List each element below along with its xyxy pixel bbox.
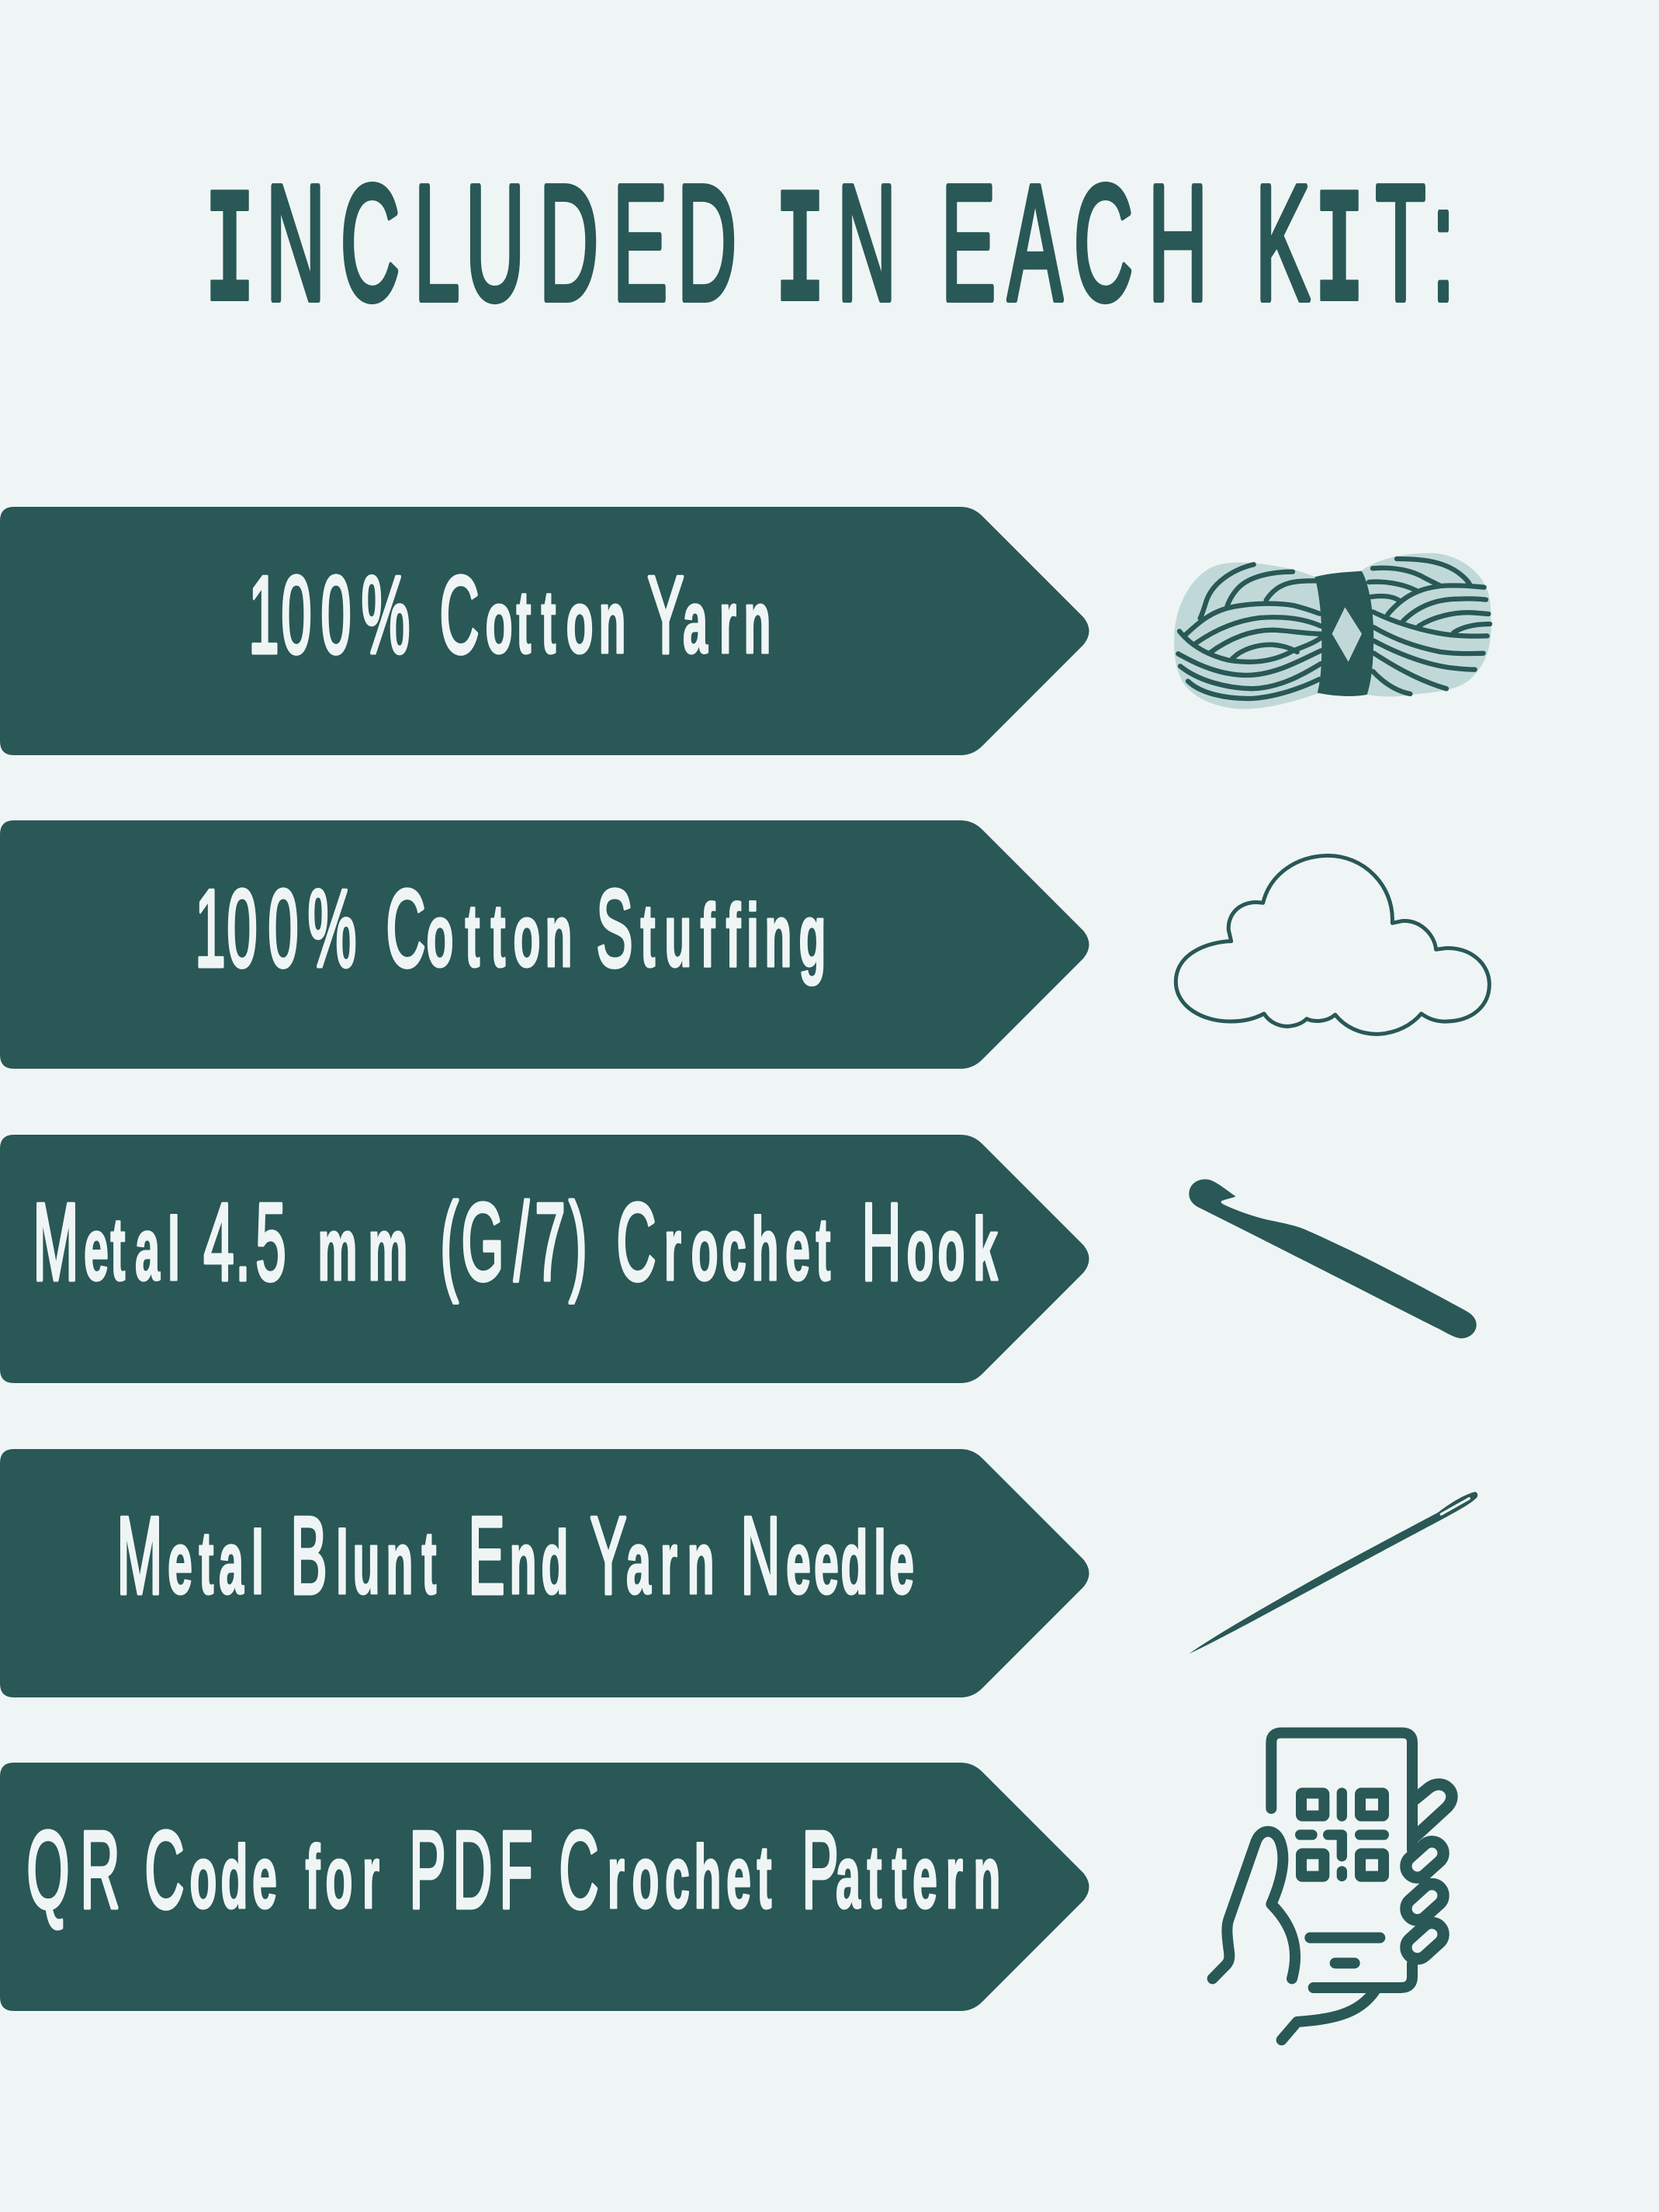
label: 100% Cotton Stuffing: 100% [195, 866, 380, 990]
label: 100% Cotton Yarn: 100% [248, 553, 431, 676]
label: Metal 4.5 mm (G/7) Crochet Hook: (G/7) [440, 1180, 613, 1303]
title: T: [1376, 151, 1455, 335]
label: QR Code for PDF Crochet Pattern: PDF C [409, 1808, 599, 1931]
label: Metal 4.5 mm (G/7) Crochet Hook: rochet [664, 1201, 860, 1299]
label: Metal Blunt End Yarn Needle: Y [590, 1493, 627, 1617]
label: Metal Blunt End Yarn Needle: M [116, 1493, 163, 1617]
label: Metal 4.5 mm (G/7) Crochet Hook: etal [84, 1201, 200, 1299]
label: 100% Cotton Yarn: Y [647, 553, 684, 676]
title: I [205, 163, 255, 350]
label: Metal Blunt End Yarn Needle: nd [509, 1514, 588, 1613]
icon: phone with QR code in hand [1213, 1733, 1452, 2040]
icon: crochet hook [1189, 1179, 1477, 1338]
label: 100% Cotton Stuffing: tuffing [640, 887, 826, 986]
label: Metal 4.5 mm (G/7) Crochet Hook: M [33, 1180, 79, 1303]
banner arrow shape [0, 1135, 1089, 1383]
label: Metal Blunt End Yarn Needle: E [468, 1493, 505, 1617]
label: QR Code for PDF Crochet Pattern: attern [836, 1829, 1001, 1927]
title: I [775, 163, 825, 350]
panel: crochet hook banner [0, 1135, 1089, 1383]
label: 100% Cotton Stuffing: S [596, 866, 633, 990]
title: N EACH K [837, 151, 1310, 335]
banner arrow shape [0, 1449, 1089, 1697]
label: 100% Cotton Stuffing: C [386, 866, 426, 990]
icon: yarn skein [1174, 553, 1491, 709]
panel: QR code pattern banner [0, 1763, 1089, 2011]
label: Metal 4.5 mm (G/7) Crochet Hook: 4.5 [203, 1180, 310, 1303]
banner arrow shape [0, 1763, 1089, 2011]
label: Metal Blunt End Yarn Needle: lunt [336, 1514, 464, 1613]
icon: yarn needle [1189, 1492, 1477, 1654]
label: Metal Blunt End Yarn Needle: B [290, 1493, 327, 1617]
label: Metal Blunt End Yarn Needle: arn [626, 1514, 736, 1613]
label: Metal Blunt End Yarn Needle: N [740, 1493, 781, 1617]
panel: cotton stuffing banner [0, 820, 1089, 1069]
label: QR Code for PDF Crochet Pattern: ode for [189, 1829, 406, 1927]
banner arrow shape [0, 507, 1089, 755]
panel: yarn needle banner [0, 1449, 1089, 1697]
label: 100% Cotton Stuffing: otton [426, 887, 596, 986]
label: QR Code for PDF Crochet Pattern: P [802, 1808, 839, 1931]
label: QR Code for PDF Crochet Pattern: QR C [26, 1808, 185, 1931]
label: Metal Blunt End Yarn Needle: etal [168, 1514, 289, 1613]
label: Metal Blunt End Yarn Needle: eedle [786, 1514, 914, 1613]
label: 100% Cotton Yarn: otton [485, 574, 646, 672]
panel: cotton yarn banner [0, 507, 1089, 755]
banner arrow shape [0, 820, 1089, 1069]
label: Metal 4.5 mm (G/7) Crochet Hook: C [616, 1180, 656, 1303]
title: I [1314, 163, 1364, 350]
icon: cloud of stuffing [1176, 855, 1489, 1034]
label: 100% Cotton Yarn: C [439, 553, 480, 676]
label: 100% Cotton Yarn: arn [683, 574, 771, 672]
label: Metal 4.5 mm (G/7) Crochet Hook: H [861, 1180, 902, 1303]
title: NCLUDED [266, 151, 768, 335]
label: Metal 4.5 mm (G/7) Crochet Hook: ook [906, 1201, 998, 1299]
label: QR Code for PDF Crochet Pattern: rochet [608, 1829, 798, 1927]
label: Metal 4.5 mm (G/7) Crochet Hook: mm [317, 1201, 425, 1299]
